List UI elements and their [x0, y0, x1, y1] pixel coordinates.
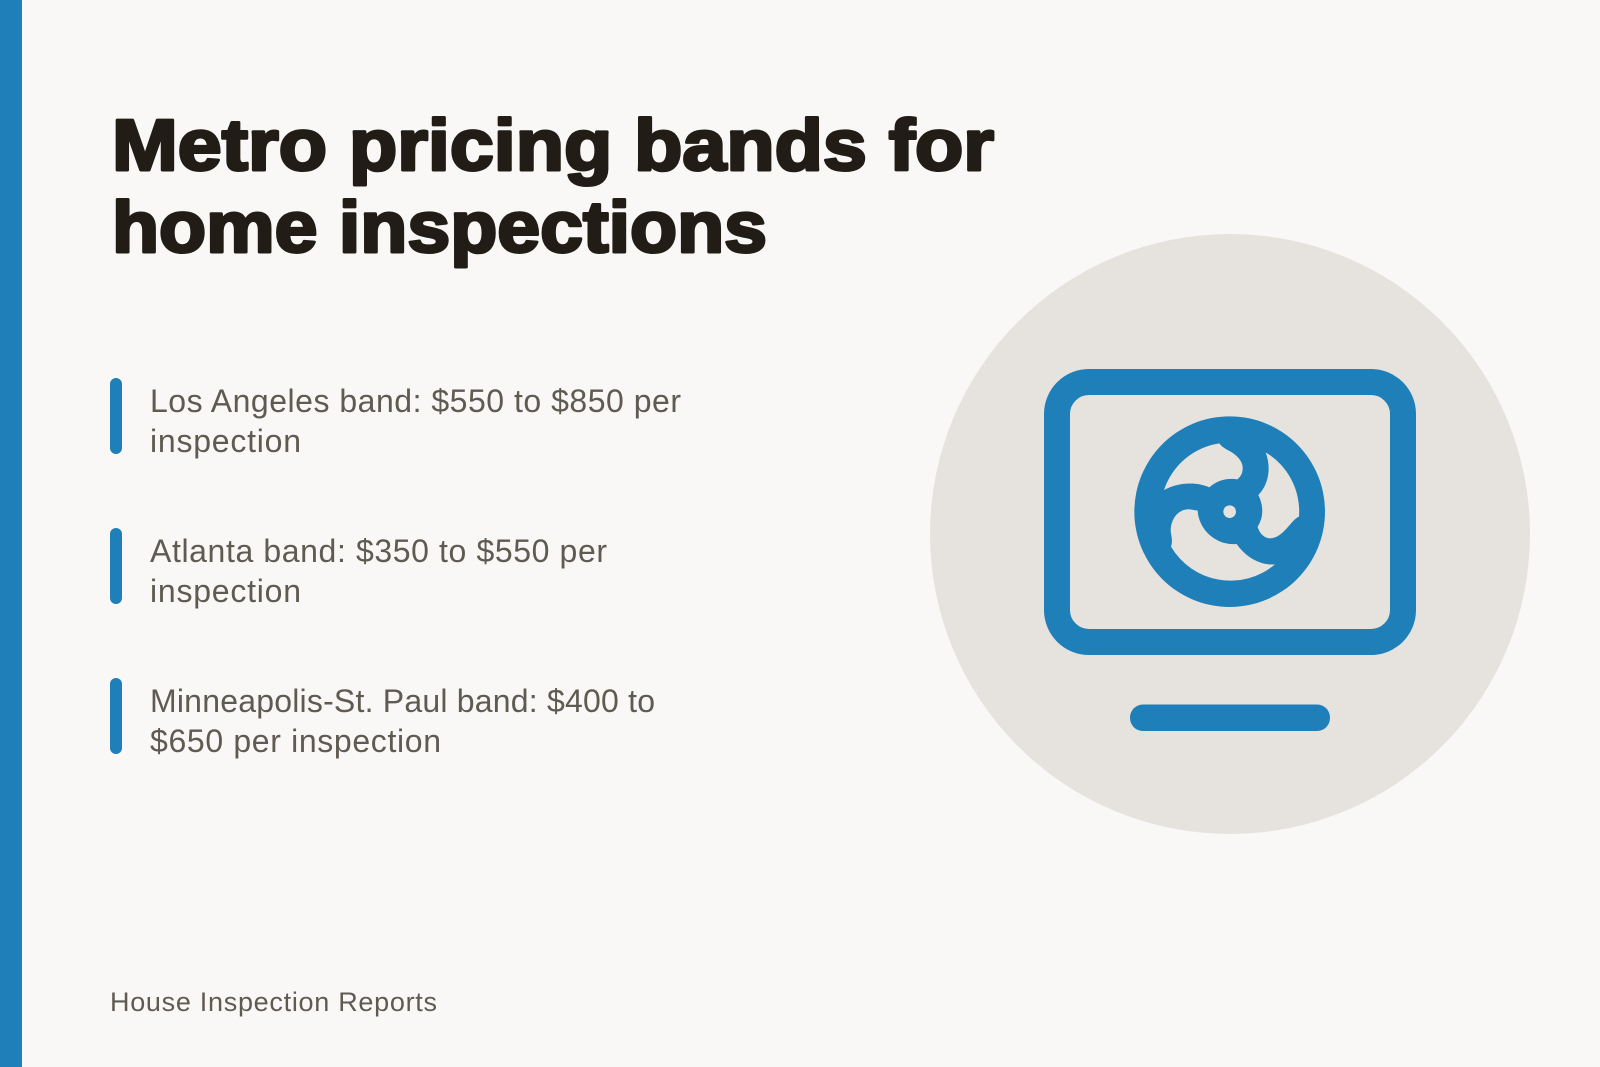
left accent bar [0, 0, 22, 1067]
bullet: Los Angeles: inspection [150, 423, 301, 459]
monitor stand [1130, 704, 1330, 731]
title [112, 106, 994, 268]
icon background circle [930, 234, 1530, 834]
bullet: Minneapolis-St. Paul [110, 678, 655, 759]
bullet list [110, 378, 681, 759]
title: Metro pricing bands for [112, 106, 994, 186]
bullet: Atlanta: inspection [150, 573, 301, 609]
fan [1134, 416, 1325, 607]
title: home inspections [112, 188, 767, 268]
monitor frame [1057, 382, 1403, 642]
bullet: Atlanta [110, 528, 607, 609]
bullet: Los Angeles [110, 378, 681, 459]
bullet: Los Angeles: Los Angeles band: $550 to $850 per [150, 383, 681, 419]
bullet: Atlanta: Atlanta band: $350 to $550 per [150, 533, 607, 569]
bullet: Minneapolis-St. Paul: $650 per inspection [150, 723, 441, 759]
footer source: House Inspection Reports [110, 987, 437, 1017]
icon: monitor with fan in circle [930, 234, 1530, 834]
bullet: Minneapolis-St. Paul: Minneapolis-St. Paul band: $400 to [150, 683, 655, 719]
